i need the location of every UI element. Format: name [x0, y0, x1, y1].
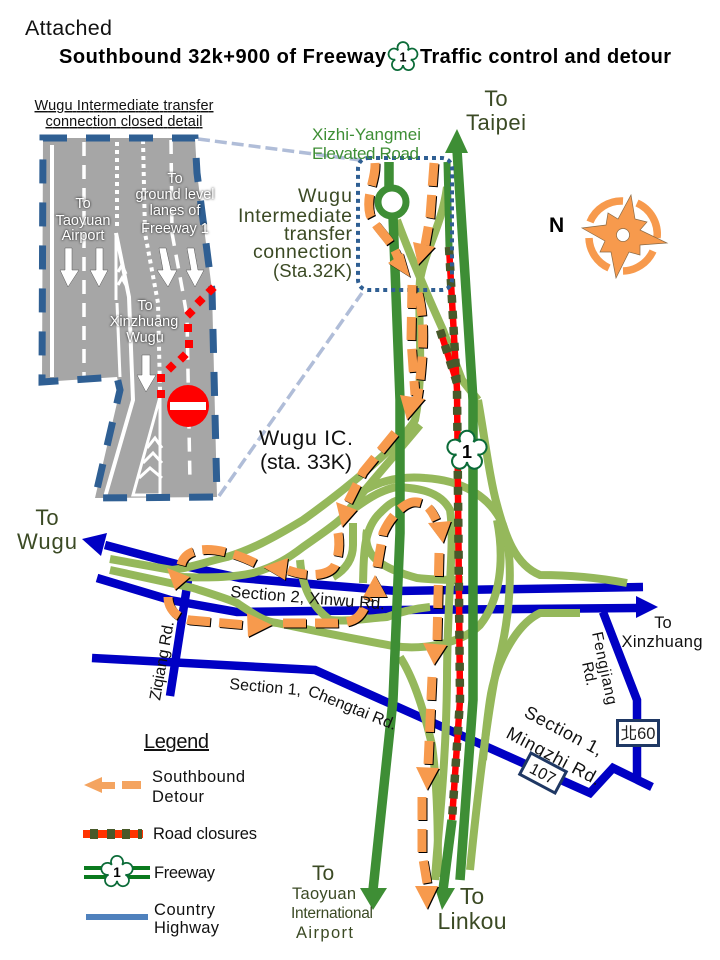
icon: freeway 1 shield on map: 1	[462, 442, 472, 462]
lane labels: To	[137, 298, 153, 314]
road label: Section 1, Chengtai Rd.	[229, 676, 399, 734]
legend: southbound detour: Detour	[152, 788, 204, 806]
legend: freeway: Freeway	[154, 864, 216, 882]
icon: freeway 1 shield in title	[389, 42, 417, 70]
detail panel heading	[34, 98, 214, 130]
map label: Xizhi-Yangmei Elevated Road: Xizhi-Yangmei	[312, 125, 421, 144]
map: light green interchange ramps	[110, 187, 627, 880]
white direction arrows	[60, 248, 204, 392]
map label: To Taoyuan International Airport: Taoyuan	[292, 885, 356, 903]
icon: elevated road ring	[378, 188, 406, 216]
title: Southbound 32k+900 of Freeway	[59, 46, 387, 68]
map label: Xizhi-Yangmei Elevated Road: Elevated Road	[312, 144, 419, 163]
title: Traffic control and detour	[420, 46, 671, 68]
map label: To Taoyuan International Airport: International	[291, 905, 373, 922]
map label: To Taipei	[466, 86, 526, 135]
map label: To Xinzhuang	[622, 614, 702, 651]
map label: Wugu IC: (sta. 33K)	[260, 450, 352, 474]
lane labels: ground level	[136, 187, 214, 203]
detail panel heading: Wugu Intermediate transfer	[34, 98, 214, 114]
lane labels	[56, 171, 214, 346]
icon: no entry sign	[167, 385, 209, 427]
panel: legend	[83, 731, 257, 937]
lane labels: Airport	[62, 228, 104, 244]
map: road closure strip	[440, 247, 460, 820]
legend: freeway	[84, 856, 216, 886]
map label: Wugu Intermediate transfer connection: Intermediate	[238, 205, 352, 227]
title	[59, 42, 671, 70]
road label: Section 1, Mingzhi Rd.: Section 1,	[521, 702, 606, 760]
legend heading: Legend	[144, 731, 209, 753]
lane labels: To	[167, 171, 183, 187]
map label: Wugu Intermediate transfer connection: connection	[253, 241, 352, 263]
map label: Wugu IC: Wugu IC.	[259, 426, 353, 450]
icon: compass	[582, 195, 667, 278]
road label: Section 1, Mingzhi Rd.: Mingzhi Rd.	[503, 723, 604, 789]
legend: road closures	[83, 825, 257, 843]
legend: southbound detour: Southbound	[152, 768, 245, 786]
map label: Wugu Intermediate transfer connection	[238, 185, 352, 281]
legend: country highway	[86, 901, 220, 937]
legend: southbound detour	[84, 768, 245, 806]
label: Attached: Attached	[25, 16, 112, 40]
map label: To Linkou: Linkou	[438, 908, 506, 934]
icon: route Bei 60 shield: 北60	[621, 724, 655, 743]
map label: To Wugu: Wugu	[17, 529, 77, 554]
lane labels: lanes of	[150, 203, 201, 219]
panel outline	[42, 138, 217, 498]
icon: route Bei 60 shield	[618, 720, 658, 746]
detail panel heading: connection closed detail	[46, 114, 202, 130]
map: dark green freeway lines	[360, 129, 473, 910]
map label: To Taipei: To	[484, 86, 508, 111]
road label: Section 1, Chengtai Rd.: Chengtai Rd.	[306, 683, 399, 734]
road label: Ziqiang Rd.: Ziqiang Rd.	[147, 620, 178, 702]
lane labels: Freeway 1	[141, 221, 209, 237]
closure dots	[157, 284, 217, 398]
road label: Section 1, Chengtai Rd.: Section 1,	[229, 676, 302, 699]
legend: road closures: Road closures	[153, 825, 257, 843]
panel: closed connection detail	[42, 138, 217, 498]
label: N: N	[549, 214, 564, 237]
map label: To Xinzhuang: Xinzhuang	[622, 633, 702, 651]
map label: Wugu IC	[259, 426, 353, 474]
map label: Wugu Intermediate transfer connection: (Sta.32K)	[273, 260, 352, 281]
road label: Fengjiang Rd.: Fengjiang	[588, 630, 620, 706]
legend: freeway: 1	[113, 865, 121, 880]
icon: freeway 1 shield in title: 1	[400, 50, 406, 64]
map: orange southbound detour	[167, 163, 451, 909]
map: blue local roads	[82, 533, 658, 793]
map label: To Taoyuan International Airport	[291, 862, 373, 942]
road surface	[42, 138, 217, 498]
legend: country highway: Country	[154, 901, 216, 919]
map label: To Taoyuan International Airport: To	[312, 862, 334, 885]
lane labels: Taoyuan	[56, 213, 110, 229]
map label: To Xinzhuang: To	[654, 614, 672, 632]
lane labels: Wugu	[126, 330, 164, 346]
map label: Wugu Intermediate transfer connection: Wugu	[298, 185, 352, 207]
map label: To Linkou: To	[460, 883, 484, 909]
map label: To Taoyuan International Airport: Airport	[296, 924, 353, 942]
map label: To Wugu: To	[35, 505, 59, 530]
map label: Xizhi-Yangmei Elevated Road	[312, 125, 421, 163]
lane labels: Xinzhuang	[110, 314, 178, 330]
icon: freeway 1 shield on map	[447, 431, 487, 469]
map label: To Taipei: Taipei	[466, 110, 526, 135]
icon: route 107 shield: 107	[527, 761, 558, 788]
road label: Fengjiang Rd.: Rd.	[578, 660, 600, 687]
map label: To Wugu	[17, 505, 77, 554]
map label: Wugu Intermediate transfer connection: transfer	[284, 223, 352, 245]
map: dotted transfer connection box	[358, 158, 452, 290]
connector lines from detail panel to map	[198, 139, 362, 496]
legend: country highway: Highway	[154, 919, 220, 937]
icon: route 107 shield	[520, 753, 566, 793]
map label: To Linkou	[438, 883, 506, 934]
lane markings	[52, 140, 190, 497]
lane labels: To	[75, 196, 91, 212]
road label: Section 2, Xinwu Rd.: Section 2, Xinwu Rd.	[230, 583, 386, 613]
